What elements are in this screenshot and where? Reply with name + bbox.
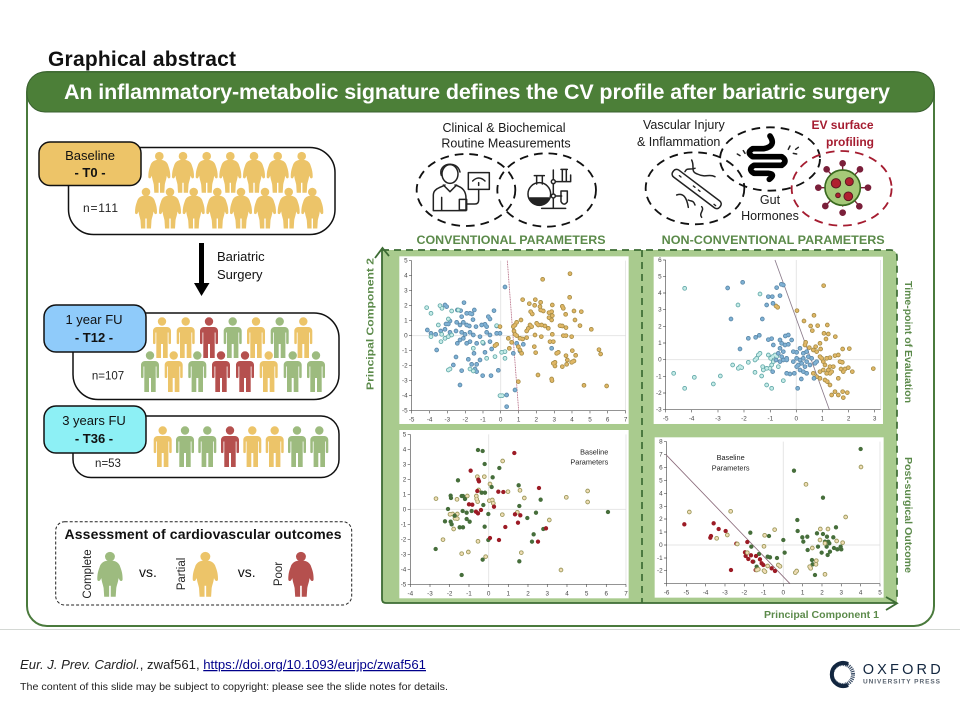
label: EV surface profiling: EV surface — [811, 118, 874, 132]
axis label: principal component 2: Principal Component 2 — [364, 258, 376, 390]
vs: vs. — [238, 564, 256, 580]
y ticks — [657, 439, 663, 575]
T12 label — [44, 305, 146, 352]
y ticks: 0 — [659, 542, 663, 549]
x ticks: 4 — [570, 417, 574, 424]
y ticks: 2 — [659, 516, 663, 523]
y ticks: 0 — [403, 506, 407, 513]
baseline parameters label: Parameters — [570, 458, 609, 467]
x ticks: 2 — [526, 590, 530, 597]
y ticks — [656, 257, 662, 414]
logo: Oxford University Press: UNIVERSITY PRESS — [863, 678, 941, 686]
label: EV surface profiling: profiling — [826, 135, 874, 149]
y ticks: 2 — [403, 476, 407, 483]
heading: clinical and biochemical: Clinical & Biochemical — [443, 121, 565, 135]
separation line — [775, 260, 829, 410]
label: gut hormones: Gut — [760, 193, 781, 207]
x ticks: -4 — [427, 417, 433, 424]
heading: vascular injury — [637, 118, 725, 149]
y ticks: -1 — [401, 521, 407, 528]
x ticks: -2 — [742, 589, 748, 596]
T36 people — [154, 426, 328, 467]
y ticks: -5 — [401, 581, 407, 588]
x ticks: -5 — [684, 589, 690, 596]
blue points T12 — [427, 287, 552, 407]
gut rays — [737, 146, 798, 156]
x ticks: -6 — [664, 589, 670, 596]
y ticks: -2 — [656, 390, 662, 397]
label: gut hormones — [741, 193, 799, 223]
y ticks: 1 — [659, 529, 663, 536]
x ticks: 3 — [553, 417, 557, 424]
heading: vascular injury: Vascular Injury — [643, 118, 725, 132]
x ticks: -3 — [427, 590, 433, 597]
y ticks: -2 — [401, 536, 407, 543]
y ticks: 1 — [404, 318, 408, 325]
red poor points — [684, 523, 775, 571]
x ticks: -4 — [703, 589, 709, 596]
separation line — [507, 261, 519, 411]
baseline parameters label: Baseline — [580, 447, 608, 456]
copyright note: The content of this slide may be subject to copyright: please see the slide notes for details. — [20, 682, 448, 693]
heading: non-conventional parameters: NON-CONVENTIONAL PARAMETERS — [662, 233, 885, 247]
panel: assessment of cardiovascular outcomes — [56, 522, 352, 605]
y ticks: 5 — [404, 258, 408, 265]
x ticks: 3 — [873, 416, 877, 423]
x ticks: -5 — [409, 417, 415, 424]
x ticks: 6 — [605, 590, 609, 597]
T36 label: - T36 - — [75, 431, 113, 446]
x ticks: 1 — [801, 589, 805, 596]
x ticks: 5 — [878, 589, 882, 596]
complete figure — [82, 549, 123, 599]
n=53: n=53 — [95, 458, 121, 470]
x ticks: 5 — [588, 417, 592, 424]
y ticks: 3 — [404, 288, 408, 295]
x ticks: 2 — [820, 589, 824, 596]
x ticks: 3 — [840, 589, 844, 596]
y ticks — [402, 258, 408, 415]
x ticks — [409, 417, 628, 424]
x ticks: 3 — [546, 590, 550, 597]
y ticks: -3 — [402, 378, 408, 385]
heading: graphical abstract: Graphical abstract — [48, 48, 236, 71]
baseline parameters label: Baseline — [717, 453, 745, 462]
y ticks: 2 — [658, 323, 662, 330]
x ticks: -2 — [741, 416, 747, 423]
y ticks: -2 — [402, 363, 408, 370]
y ticks: 5 — [658, 273, 662, 280]
panel: 1 year follow-up T12 — [44, 305, 339, 400]
main frame — [27, 72, 934, 626]
chart: conventional time-point PCA — [399, 256, 629, 424]
baseline parameters label: Parameters — [712, 464, 750, 473]
partial figure: Partial — [176, 558, 188, 590]
x ticks: -3 — [715, 416, 721, 423]
heading: conventional parameters: CONVENTIONAL PARAMETERS — [416, 233, 606, 247]
baseline label: - T0 - — [74, 165, 106, 180]
x ticks: 2 — [535, 417, 539, 424]
icon: blood vessel — [671, 160, 723, 217]
y ticks: 0 — [404, 333, 408, 340]
baseline label — [39, 142, 141, 186]
gold points T0 — [495, 274, 607, 386]
y ticks: 0 — [658, 357, 662, 364]
baseline label: Baseline — [65, 148, 115, 163]
y ticks: 2 — [404, 303, 408, 310]
y ticks: -4 — [402, 393, 408, 400]
blue points T12 — [728, 282, 817, 388]
panel: baseline T0 — [39, 142, 335, 234]
x ticks: -1 — [767, 416, 774, 423]
y ticks: -2 — [657, 568, 663, 575]
icon: clinician with monitor — [433, 164, 489, 211]
label: EV surface profiling — [811, 118, 874, 149]
y ticks: 7 — [659, 452, 663, 459]
x ticks — [663, 416, 877, 423]
y ticks: 4 — [658, 290, 662, 297]
x ticks: -4 — [689, 416, 695, 423]
panel: 3 years follow-up T36 — [44, 406, 339, 478]
y ticks: -1 — [657, 555, 663, 562]
axis label: post-surgical outcome: Post-surgical Outcome — [902, 457, 914, 573]
icon: clinical measurement and lab — [417, 153, 596, 227]
x ticks: 5 — [585, 590, 589, 597]
x ticks: -1 — [480, 417, 486, 424]
x ticks: -1 — [761, 589, 767, 596]
x ticks: 4 — [859, 589, 863, 596]
icon: non-conventional measurement cluster — [646, 127, 892, 226]
x ticks: -1 — [466, 590, 472, 597]
x ticks: 0 — [795, 416, 799, 423]
y ticks: -3 — [656, 407, 662, 414]
x ticks: 7 — [624, 417, 628, 424]
x ticks: -5 — [663, 416, 669, 423]
y ticks: 1 — [403, 491, 407, 498]
separation line — [666, 455, 790, 584]
x ticks: 4 — [565, 590, 569, 597]
panel: green PCA background — [375, 248, 897, 610]
axis label: principal component 1: Principal Component 1 — [764, 609, 879, 621]
icon: gut — [749, 136, 785, 179]
x ticks: 1 — [821, 416, 825, 423]
pale partial points — [436, 461, 588, 570]
x ticks: 2 — [847, 416, 851, 423]
n=111: n=111 — [83, 201, 118, 215]
x ticks: -2 — [463, 417, 469, 424]
label: gut hormones: Hormones — [741, 209, 799, 223]
T36 label: 3 years FU — [62, 413, 126, 428]
heading: vascular injury: & Inflammation — [637, 135, 720, 149]
y ticks — [401, 431, 407, 588]
chart: non-conventional outcome PCA — [655, 437, 884, 598]
green complete points — [436, 450, 608, 575]
y ticks: 6 — [659, 464, 663, 471]
icon: extracellular vesicle — [815, 160, 871, 216]
logo: Oxford University Press — [832, 662, 941, 686]
y ticks: -1 — [656, 373, 662, 380]
x ticks: -3 — [445, 417, 451, 424]
y ticks: 3 — [403, 461, 407, 468]
panel: assessment of cardiovascular outcomes: Assessment of cardiovascular outcomes — [64, 526, 342, 542]
y ticks: 4 — [403, 446, 407, 453]
teal points T36 — [427, 306, 505, 396]
x ticks: 7 — [624, 590, 628, 597]
gold points T0 — [776, 286, 873, 398]
y ticks: -1 — [402, 348, 408, 355]
x ticks: 0 — [499, 417, 503, 424]
complete figure: Complete — [82, 549, 94, 599]
citation: Eur. J. Prev. Cardiol. , zwaf561, https://doi.org/10.1093/eurjpc/zwaf561 — [20, 658, 426, 672]
footer rule — [0, 629, 960, 630]
icon: flask and stand — [528, 169, 571, 208]
poor figure — [273, 552, 314, 597]
x ticks: 1 — [517, 417, 521, 424]
logo: Oxford University Press: OXFORD — [863, 662, 941, 678]
T12 people — [141, 317, 325, 392]
arrow: bariatric surgery — [194, 243, 265, 296]
y ticks: 1 — [658, 340, 662, 347]
T36 label — [44, 406, 146, 453]
y ticks: 4 — [404, 273, 408, 280]
x ticks: 6 — [606, 417, 610, 424]
y ticks: 5 — [403, 431, 407, 438]
x ticks — [664, 589, 882, 596]
y ticks: -3 — [401, 551, 407, 558]
baseline people — [135, 152, 323, 228]
y ticks: 4 — [659, 490, 663, 497]
T12 label: - T12 - — [75, 330, 113, 345]
baseline parameters label — [712, 453, 750, 473]
x ticks — [408, 590, 628, 597]
title banner — [27, 72, 934, 112]
arrow: bariatric surgery: Surgery — [217, 267, 263, 282]
baseline parameters label — [570, 447, 609, 467]
y ticks: 6 — [658, 257, 662, 264]
y ticks: 8 — [659, 439, 663, 446]
x ticks: -2 — [447, 590, 453, 597]
x ticks: 0 — [487, 590, 491, 597]
y ticks: -4 — [401, 566, 407, 573]
x ticks: 1 — [507, 590, 511, 597]
axis label: time-point of evaluation: Time-point of Evaluation — [902, 281, 914, 403]
chart: non-conventional time-point PCA — [654, 257, 883, 424]
partial figure — [176, 552, 218, 597]
x ticks: 0 — [782, 589, 786, 596]
title banner: An inflammatory-metabolic signature defines the CV profile after bariatric surgery — [64, 80, 890, 104]
y ticks: -5 — [402, 408, 408, 415]
y ticks: 5 — [659, 477, 663, 484]
y ticks: 3 — [659, 503, 663, 510]
y ticks: 3 — [658, 307, 662, 314]
poor figure: Poor — [273, 562, 285, 586]
chart: conventional outcome PCA — [399, 430, 629, 598]
pale partial points — [689, 467, 861, 574]
teal points T36 — [674, 288, 783, 388]
x ticks: -4 — [408, 590, 414, 597]
x ticks: -3 — [722, 589, 728, 596]
n=107: n=107 — [92, 370, 124, 382]
T12 label: 1 year FU — [65, 312, 123, 327]
heading: clinical and biochemical: Routine Measurements — [441, 136, 571, 150]
arrow: bariatric surgery: Bariatric — [217, 249, 265, 264]
heading: clinical and biochemical — [441, 121, 571, 150]
red poor points — [469, 453, 546, 542]
green complete points — [750, 449, 861, 575]
vs: vs. — [139, 564, 157, 580]
